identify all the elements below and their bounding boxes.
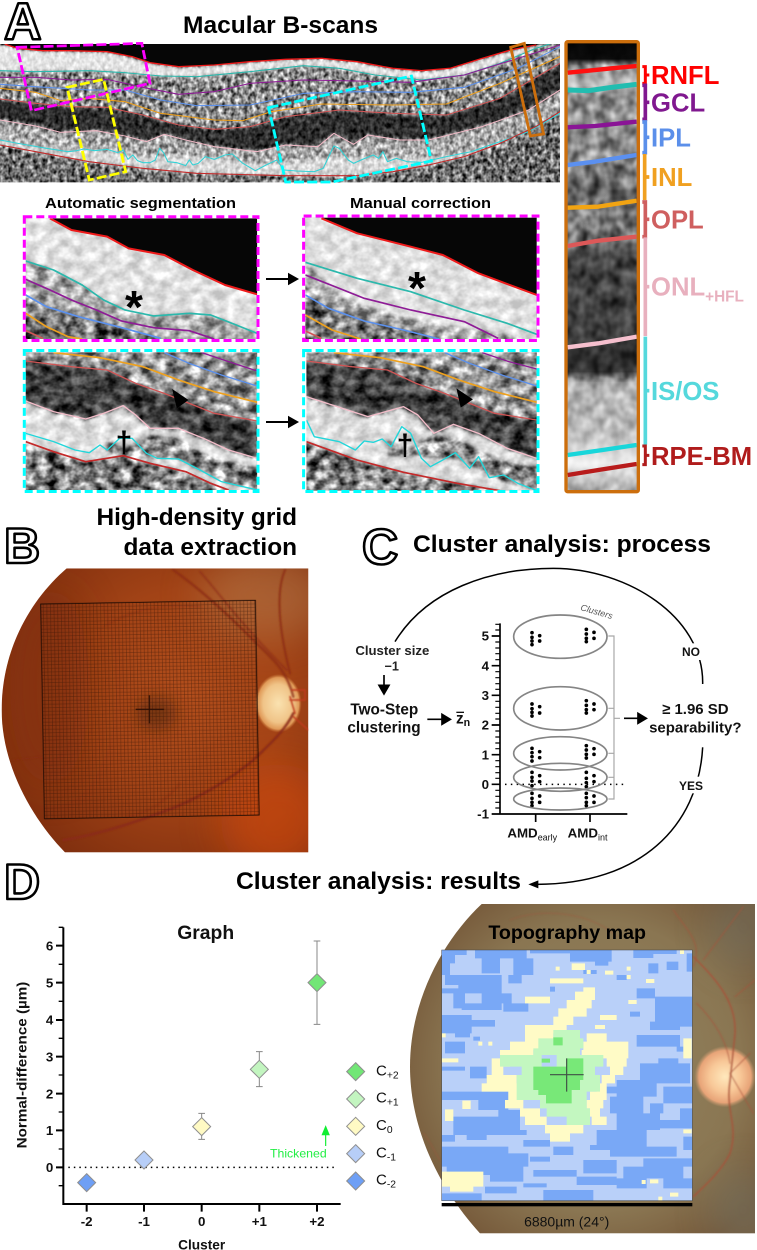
panel: main B-scan image with layer lines and region boxes xyxy=(0,42,560,184)
heading: Automatic segmentation: Automatic segmentation xyxy=(45,196,236,212)
layer labels: RNFL xyxy=(651,62,719,90)
scale bar xyxy=(442,1203,692,1206)
title: High-density grid data extraction xyxy=(96,504,297,561)
x tick labels: -2 xyxy=(81,1214,93,1229)
scale label: 6880µm (24°) xyxy=(524,1214,609,1230)
title: Macular B-scans: Macular B-scans xyxy=(183,12,378,39)
region box: magenta xyxy=(17,43,150,111)
x tick labels xyxy=(81,1214,325,1229)
marker: dagger: † xyxy=(116,426,132,459)
chart axis labels: 4 xyxy=(482,658,490,673)
text: z-bar n: n xyxy=(464,717,470,729)
zero line xyxy=(68,1165,337,1170)
data points xyxy=(78,974,326,1192)
y tick labels: 3 xyxy=(46,1049,53,1064)
optic disc xyxy=(255,674,302,733)
y tick labels: 6 xyxy=(46,938,53,953)
text: z-bar n xyxy=(456,710,470,729)
text: 1.96 SD separability: ≥ 1.96 SD xyxy=(662,701,729,718)
legend: 0 xyxy=(387,1125,393,1136)
arrow: down to two-step xyxy=(379,675,389,694)
layer labels: GCL xyxy=(651,90,705,118)
fovea crosshair xyxy=(550,1058,584,1092)
label: NO: NO xyxy=(682,645,700,659)
legend: +1 xyxy=(387,1098,399,1109)
x labels AMD early and int: AMD xyxy=(568,825,598,840)
annotation: Thickened: Thickened xyxy=(270,1148,327,1161)
title: Cluster analysis: results: Cluster analysis: results xyxy=(236,868,521,895)
cluster ellipses xyxy=(514,615,607,810)
legend: C xyxy=(376,1062,387,1079)
panel: cluster analysis process diagram xyxy=(347,568,742,888)
marker: arrowhead xyxy=(172,389,189,408)
panel: automatic segmentation, magenta crop xyxy=(22,215,260,342)
panel: topography map on fundus xyxy=(410,887,757,1250)
legend: -1 xyxy=(387,1152,396,1163)
clusters bracket xyxy=(608,636,620,799)
chart axes xyxy=(492,623,627,822)
panel: fundus photo with high-density grid xyxy=(0,553,333,877)
text: Two-Step clustering: clustering xyxy=(347,720,421,737)
panel: automatic segmentation, cyan crop xyxy=(22,349,260,493)
y tick labels xyxy=(46,938,54,1175)
chart: normal-difference by cluster xyxy=(15,923,399,1250)
legend: +2 xyxy=(387,1070,399,1081)
marker: asterisk: * xyxy=(125,281,143,333)
map title: Topography map xyxy=(488,923,646,944)
region box: cyan xyxy=(269,76,431,182)
loop arc: NO xyxy=(395,568,703,684)
x labels AMD early and int: early xyxy=(538,833,558,843)
legend: C xyxy=(376,1117,387,1134)
y tick labels: 5 xyxy=(46,975,54,990)
layer labels: ONL xyxy=(651,274,705,302)
chart axis labels: -1 xyxy=(477,807,490,822)
label: Clusters: Clusters xyxy=(579,602,614,621)
y tick labels: 0 xyxy=(46,1160,53,1175)
panel letter: D: D xyxy=(4,854,40,910)
fundus background xyxy=(410,887,757,1250)
text: Cluster size: −1 xyxy=(384,660,399,674)
label: NO xyxy=(678,643,703,660)
label: YES: YES xyxy=(679,779,703,793)
marker: asterisk: * xyxy=(408,262,426,314)
layer labels: +HFL xyxy=(705,289,744,306)
label: YES xyxy=(675,777,707,793)
loop arc: YES, to results xyxy=(528,747,703,888)
title: High-density grid data extraction: High-density grid xyxy=(96,504,297,531)
layer labels xyxy=(651,62,752,471)
x tick labels: +1 xyxy=(252,1214,268,1229)
panel letter: C: C xyxy=(362,519,398,575)
topography grid xyxy=(442,950,692,1201)
text: Two-Step clustering: Two-Step xyxy=(350,701,418,718)
legend: C xyxy=(376,1090,387,1107)
annotation: Thickened xyxy=(270,1127,329,1161)
x tick labels: 0 xyxy=(198,1214,205,1229)
data dots xyxy=(530,627,596,807)
title: High-density grid data extraction: data extraction xyxy=(124,534,297,561)
y tick labels: 1 xyxy=(46,1123,54,1138)
legend: -2 xyxy=(387,1180,396,1191)
x labels AMD early and int: int xyxy=(598,833,608,843)
y axis title: Normal-difference (µm) xyxy=(15,982,30,1148)
legend: C xyxy=(376,1144,387,1161)
chart axis labels: 5 xyxy=(482,629,490,644)
text: z-bar n: z xyxy=(456,710,464,727)
text: Cluster size xyxy=(350,643,433,674)
text: Two-Step clustering xyxy=(347,701,421,737)
x labels AMD early and int: AMD xyxy=(507,825,538,840)
arrow: automatic to manual, cyan row xyxy=(266,418,297,426)
layer labels: OPL xyxy=(651,206,704,234)
chart axis labels: 2 xyxy=(482,718,489,733)
legend: C xyxy=(376,1172,387,1189)
text: 1.96 SD separability xyxy=(649,701,742,737)
region box: orange strip location xyxy=(511,43,544,136)
fovea xyxy=(137,697,177,730)
title: Cluster analysis: process: Cluster analysis: process xyxy=(413,531,711,558)
legend xyxy=(347,1062,399,1191)
layer labels: IS/OS xyxy=(651,378,719,406)
layer labels: RPE-BM xyxy=(651,443,752,471)
layer brackets xyxy=(642,67,649,465)
chart axis labels xyxy=(477,629,490,822)
region box: yellow xyxy=(67,79,126,180)
marker: arrowhead xyxy=(456,388,473,408)
chart axis labels: 1 xyxy=(482,747,490,762)
strip image xyxy=(566,42,638,492)
grid overlay xyxy=(41,600,259,819)
error bars xyxy=(198,941,320,1139)
zero line xyxy=(505,782,627,787)
heading: Manual correction: Manual correction xyxy=(350,196,491,212)
fovea crosshair xyxy=(136,695,164,723)
axes and ticks xyxy=(56,927,341,1212)
text: 1.96 SD separability: separability? xyxy=(649,720,742,737)
marker: dagger: † xyxy=(397,429,413,462)
panel: manual correction, magenta crop xyxy=(302,214,540,342)
x tick labels: -1 xyxy=(138,1214,151,1229)
x labels AMD early and int xyxy=(507,825,608,843)
panel letter: B: B xyxy=(4,518,40,574)
y tick labels: 4 xyxy=(46,1013,54,1028)
text: Cluster size: Cluster size xyxy=(355,644,429,658)
arrow: automatic to manual, magenta row xyxy=(266,274,297,284)
layer labels: IPL xyxy=(651,125,691,153)
panel: retinal layer strip with labels xyxy=(566,42,752,492)
x tick labels: +2 xyxy=(309,1214,325,1229)
chart axis labels: 3 xyxy=(482,688,489,703)
panel: manual correction, cyan crop xyxy=(302,349,540,493)
y tick labels: 2 xyxy=(46,1086,53,1101)
chart title: Graph xyxy=(177,923,234,944)
arrow: to separability xyxy=(624,713,646,723)
arrow: clustering to z xyxy=(427,714,450,724)
layer labels: INL xyxy=(651,164,692,192)
chart axis labels: 0 xyxy=(482,777,489,792)
